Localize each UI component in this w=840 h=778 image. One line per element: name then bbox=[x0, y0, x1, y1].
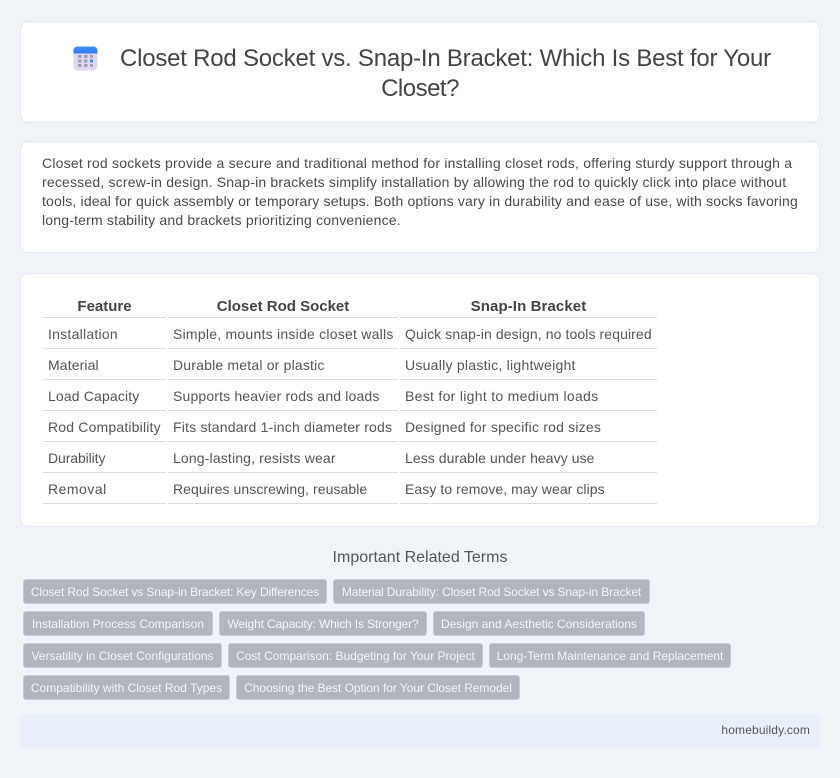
comparison table: Requires unscrewing, reusable bbox=[173, 481, 367, 497]
comparison table: Durability bbox=[48, 450, 105, 466]
comparison table: Material bbox=[48, 357, 99, 373]
comparison table: Supports heavier rods and loads bbox=[173, 388, 380, 404]
footer source: homebuildy.com bbox=[721, 723, 810, 737]
table header: snap-in bracket: Snap-In Bracket bbox=[471, 298, 586, 315]
related terms tags: Choosing the Best Option for Your Closet Remodel bbox=[244, 681, 512, 695]
related terms tags: Cost Comparison: Budgeting for Your Project bbox=[236, 649, 475, 663]
comparison table: Fits standard 1-inch diameter rods bbox=[173, 419, 392, 435]
intro text bbox=[42, 155, 798, 228]
comparison table: Best for light to medium loads bbox=[405, 388, 598, 404]
related terms tags: Material Durability: Closet Rod Socket vs Snap-in Bracket bbox=[342, 585, 641, 599]
related terms tags bbox=[23, 579, 731, 700]
related terms tags: Closet Rod Socket vs Snap-in Bracket: Key Differences bbox=[31, 585, 319, 599]
icon: calendar bbox=[74, 46, 98, 70]
comparison table: Long-lasting, resists wear bbox=[173, 450, 336, 466]
comparison panel bbox=[20, 273, 820, 527]
footer bar bbox=[20, 714, 820, 748]
related terms tags: Design and Aesthetic Considerations bbox=[441, 617, 637, 631]
comparison table: Quick snap-in design, no tools required bbox=[405, 326, 652, 342]
table header: closet rod socket: Closet Rod Socket bbox=[217, 298, 349, 315]
comparison table: Simple, mounts inside closet walls bbox=[173, 326, 394, 342]
related terms tags: Versatility in Closet Configurations bbox=[31, 649, 214, 663]
comparison table: Easy to remove, may wear clips bbox=[405, 481, 605, 497]
intro text: Closet rod sockets provide a secure and traditional method for installing closet rods, offering sturdy support through a bbox=[42, 155, 792, 171]
table header: feature: Feature bbox=[77, 298, 132, 315]
intro text: long-term stability and brackets prioritizing convenience. bbox=[42, 212, 401, 228]
intro text: tools, ideal for quick assembly or temporary setups. Both options vary in durability and ease of use, with socks favoring bbox=[42, 193, 798, 209]
title: Closet Rod Socket vs. Snap-In Bracket: Which Is Best for Your bbox=[120, 45, 771, 72]
comparison table: Less durable under heavy use bbox=[405, 450, 595, 466]
comparison table: Designed for specific rod sizes bbox=[405, 419, 601, 435]
comparison table bbox=[43, 298, 657, 504]
comparison table: Rod Compatibility bbox=[48, 419, 161, 435]
related terms tags: Installation Process Comparison bbox=[32, 617, 204, 631]
comparison table: Durable metal or plastic bbox=[173, 357, 325, 373]
comparison table: Removal bbox=[48, 481, 107, 497]
comparison table: Load Capacity bbox=[48, 388, 139, 404]
related terms tags: Long-Term Maintenance and Replacement bbox=[497, 649, 723, 663]
header panel bbox=[20, 21, 820, 123]
comparison table: Usually plastic, lightweight bbox=[405, 357, 576, 373]
intro panel bbox=[20, 141, 820, 253]
related terms tags: Weight Capacity: Which Is Stronger? bbox=[228, 617, 418, 631]
title bbox=[120, 45, 771, 102]
intro text: recessed, screw-in design. Snap-in brackets simplify installation by allowing the rod to quickly click into place without bbox=[42, 174, 786, 190]
related terms tags: Compatibility with Closet Rod Types bbox=[31, 681, 222, 695]
title: Closet? bbox=[381, 75, 459, 102]
comparison table: Installation bbox=[48, 326, 118, 342]
related terms heading: Important Related Terms bbox=[333, 549, 507, 566]
